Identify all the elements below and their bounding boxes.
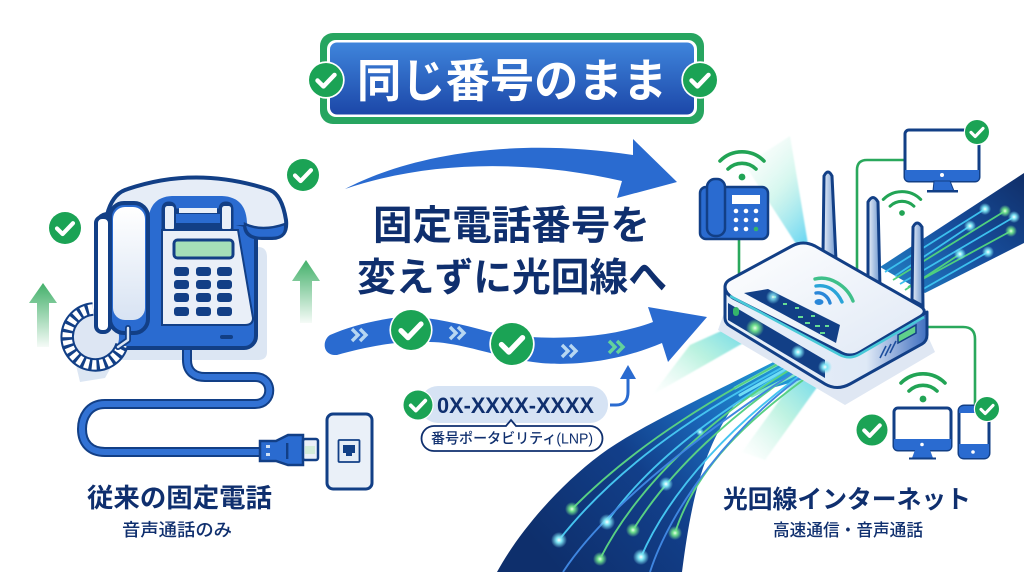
- check 1: [389, 308, 433, 352]
- check near monitor: [856, 414, 888, 446]
- plug: [260, 435, 318, 465]
- monitor top: [905, 119, 990, 192]
- wall jack: [327, 414, 372, 489]
- upper arrow: [345, 139, 677, 198]
- antennas: [823, 172, 923, 306]
- coil cord: [67, 309, 122, 365]
- label: legacy phone: 音声通話のみ: [122, 520, 232, 540]
- cable: [82, 348, 269, 452]
- cradle: [163, 203, 232, 232]
- cord hook: [118, 328, 128, 347]
- router top: [725, 243, 924, 355]
- chevrons: [352, 327, 623, 357]
- wifi middle: [883, 192, 921, 216]
- lower arrow: [325, 307, 707, 367]
- router wifi mark: [814, 278, 853, 305]
- phone shadow: [70, 247, 267, 382]
- title badge: [307, 33, 719, 124]
- router shadow: [718, 310, 935, 405]
- check: [964, 119, 990, 145]
- bright strands near router: [735, 353, 816, 396]
- display: [174, 240, 233, 258]
- title text: 同じ番号のまま: [357, 55, 667, 107]
- check right: [681, 61, 719, 99]
- keypad: [174, 267, 232, 316]
- label: fiber internet: [723, 486, 971, 540]
- dome: [148, 196, 247, 225]
- LNP label: 番号ポータビリティ(LNP): [431, 430, 593, 448]
- fiber light dots: [551, 428, 704, 566]
- handset vertical: [110, 203, 148, 333]
- check 2: [489, 321, 535, 367]
- headline: [357, 204, 667, 300]
- front fiber bundle: [497, 350, 823, 572]
- check: [402, 389, 434, 421]
- handset top: [107, 178, 286, 238]
- headline: 変えずに光回線へ: [357, 257, 667, 300]
- headline: 固定電話番号を: [373, 204, 650, 248]
- light beams: [652, 136, 828, 460]
- monitor bottom: [894, 374, 951, 460]
- check left: [307, 61, 345, 99]
- telephone: [67, 178, 286, 452]
- earpiece: [245, 224, 285, 238]
- face panel: [162, 230, 253, 325]
- rear fiber band: [880, 173, 1024, 293]
- check: [974, 396, 1000, 422]
- green arrow left: [29, 283, 57, 347]
- number pill: [402, 386, 608, 423]
- router sides: [725, 287, 927, 388]
- green arrow right: [292, 260, 320, 323]
- handset left strip: [96, 217, 110, 332]
- label: fiber internet: 光回線インターネット: [723, 486, 971, 514]
- side port: [898, 325, 916, 343]
- dark port band: [728, 303, 825, 378]
- green connector lines: [739, 160, 975, 406]
- check top right of phone: [287, 159, 319, 191]
- desk phone: [700, 152, 768, 239]
- router: [718, 243, 935, 405]
- label: legacy phone: 従来の固定電話: [87, 483, 272, 513]
- LNP label: [421, 420, 602, 451]
- smartphone: [959, 396, 1000, 458]
- fiber strands: [559, 352, 820, 572]
- small up arrow: [610, 365, 636, 405]
- bundle glow at router: [791, 345, 832, 374]
- base: [96, 214, 256, 348]
- status panel: [744, 289, 840, 343]
- label: legacy phone: [87, 483, 272, 540]
- label: fiber internet: 高速通信・音声通話: [773, 521, 923, 540]
- phone number: 0X-XXXX-XXXX: [437, 393, 594, 418]
- check top left: [49, 212, 81, 244]
